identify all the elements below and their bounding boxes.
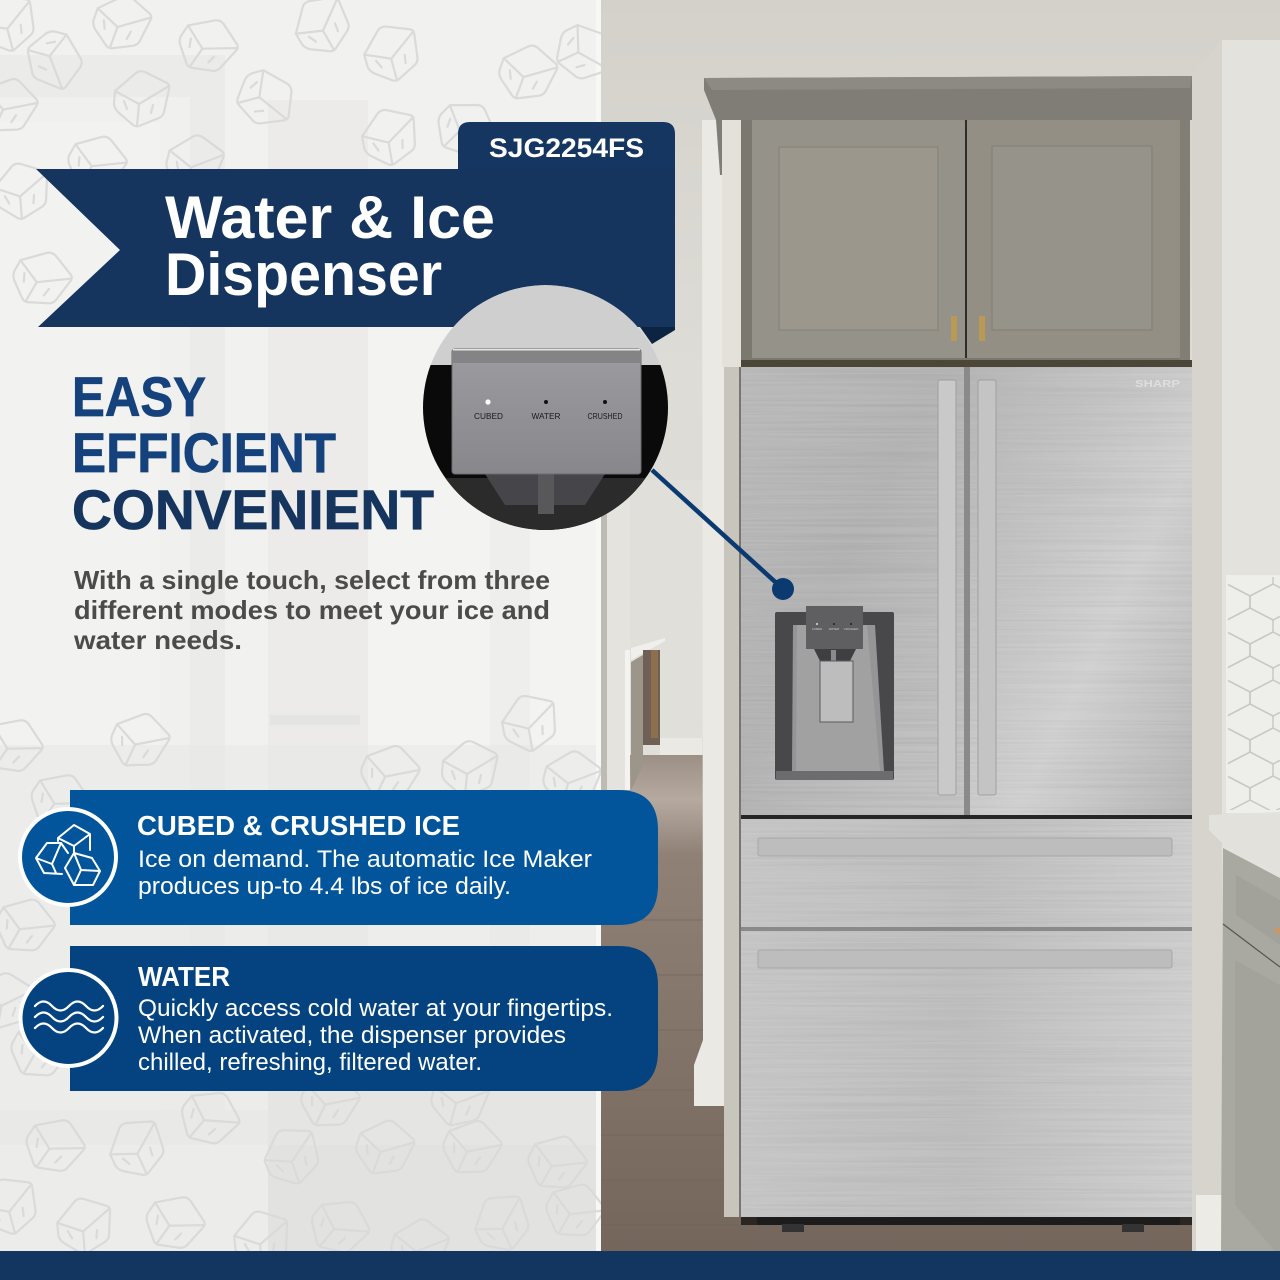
cubed mode [474,399,503,421]
card body [138,995,613,1076]
upper cabinets [704,76,1192,365]
brand logo: SHARP [1135,379,1180,390]
card body: When activated, the dispenser provides [138,1022,566,1049]
lower drawer [741,931,1192,1217]
left fridge door [741,367,964,815]
icon: water waves [20,970,116,1066]
dispenser control panel [806,606,863,649]
door casing [694,120,742,1217]
hallway pillar [601,478,630,790]
door handles [938,380,996,795]
upper drawer [741,819,1192,927]
panel: water [20,946,658,1091]
heading: easy efficient convenient [72,365,434,541]
card body: produces up-to 4.4 lbs of ice daily. [138,873,511,900]
description text: different modes to meet your ice and [74,595,550,625]
right fridge door [970,367,1192,815]
hallway counter and cabinet [631,638,702,790]
description text [73,565,550,655]
description text: With a single touch, select from three [74,565,550,595]
water paddle [820,661,853,722]
cubed mode: CUBED [474,412,503,421]
feet and shadow [741,1217,1192,1232]
dispenser control panel: WATER [829,627,840,631]
ice cube outlines [0,0,622,1279]
model tab: SJG2254FS [489,133,644,163]
hallway wall [630,480,702,755]
left cabinet door [752,120,965,358]
right cabinet door [967,120,1180,358]
heading: easy efficient convenient: CONVENIENT [72,478,434,541]
panel: ice cube pattern background [0,0,622,1279]
card body: Ice on demand. The automatic Ice Maker [138,846,592,873]
countertop and base cabinets [1209,812,1280,1251]
faded window and door frame backdrop [268,715,596,1251]
water mode [532,400,560,419]
heading: easy efficient convenient: EASY [72,365,206,428]
crushed mode [588,400,622,419]
pointer line to dispenser [652,470,794,600]
water mode: WATER [532,412,561,421]
crushed mode: CRUSHED [588,412,623,421]
control panel face [452,349,641,474]
title: Dispenser [165,241,442,308]
bottom bar [0,1251,1280,1280]
magnified dispenser panel [423,285,669,535]
card body: chilled, refreshing, filtered water. [138,1049,482,1076]
heading: easy efficient convenient: EFFICIENT [72,421,336,484]
floor [601,755,1192,1251]
dispenser control panel: CUBED [812,627,823,631]
card body [138,846,592,900]
model tab [458,122,675,169]
title: Water & Ice [165,184,495,251]
title banner [36,169,675,344]
crown molding [704,76,1192,175]
hexagon tile backsplash [1226,575,1280,813]
dispenser recess [775,606,894,780]
card body: Quickly access cold water at your fingertips. [138,995,613,1022]
dispenser control panel: CRUSHED [844,627,859,631]
drawer handles [758,838,1172,968]
icon: ice cubes [20,809,116,905]
panel: cubed and crushed ice [20,790,658,925]
refrigerator [741,360,1192,1232]
title [165,184,495,308]
kitchen photo background [601,0,1280,1251]
card heading: WATER [138,961,230,992]
card heading: CUBED & CRUSHED ICE [137,810,460,841]
description text: water needs. [73,625,242,655]
right wall [1192,40,1280,1251]
